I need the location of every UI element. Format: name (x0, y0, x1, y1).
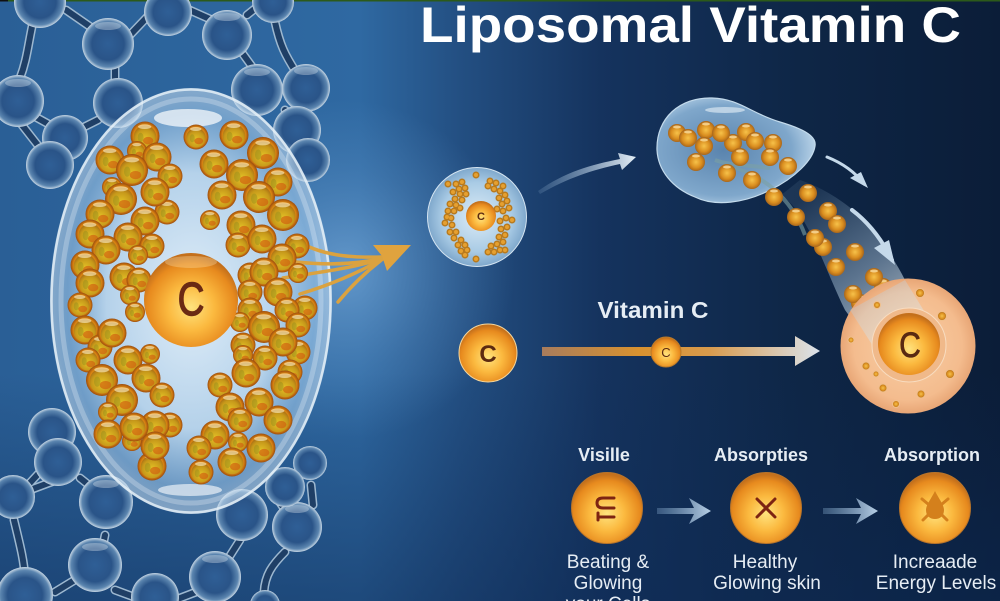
benefit 3: Absorption (876, 445, 996, 594)
benefit 3: Absorption: Absorption (884, 445, 980, 465)
straight arrow with vitamin C (542, 336, 820, 367)
icon: subset glyph (597, 498, 614, 520)
icon: cross (757, 499, 775, 517)
target cell: C (899, 326, 921, 365)
molecule lattice (0, 0, 330, 601)
benefit 1: Visille (566, 445, 650, 601)
benefit 2: Absorpties: Glowing skin (713, 573, 821, 594)
benefit 2: Absorpties: Absorpties (714, 445, 808, 465)
benefit 1: Visille: Beating & (567, 552, 650, 573)
absorption stream band (780, 180, 945, 365)
arrow: step 1 to 2 (657, 498, 711, 524)
vesicle (657, 98, 815, 235)
gold arrows (283, 238, 411, 302)
benefit 3: Absorption: Increaade (893, 552, 977, 573)
icon: droplet with rays (922, 491, 948, 520)
label: Vitamin C: Vitamin C (598, 297, 708, 323)
benefit 3: Absorption: Energy Levels (876, 573, 996, 594)
central vitamin C sphere: C (178, 273, 204, 325)
arrow: step 2 to 3 (823, 498, 878, 524)
benefit 1: Visille: Glowing (574, 573, 642, 594)
benefit 2: Absorpties: Healthy (733, 552, 798, 573)
free vitamin C sphere (459, 324, 517, 382)
central vitamin C sphere (144, 253, 238, 347)
benefit 1: Visille: Visille (578, 445, 630, 465)
target cell (840, 278, 976, 414)
small liposome (428, 168, 526, 266)
benefit 2: Absorpties (713, 445, 821, 594)
free vitamin C sphere: C (479, 341, 497, 368)
curved arrow to vesicle (538, 153, 636, 194)
straight arrow with vitamin C: C (661, 345, 671, 360)
encapsulated vitamin beads (68, 120, 318, 484)
stream of beads (765, 184, 892, 312)
large liposome capsule (50, 88, 411, 514)
small flow arrows (827, 157, 895, 265)
small liposome: C (477, 211, 485, 223)
